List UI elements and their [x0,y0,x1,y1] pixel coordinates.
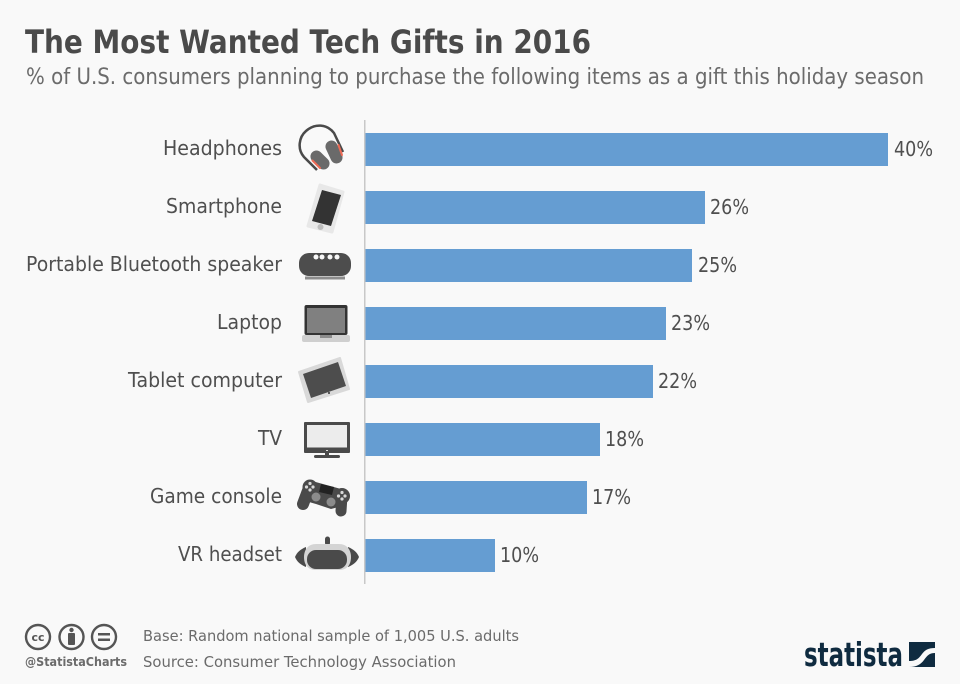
logo: statista: statista [804,635,903,674]
icon: cc: cc [31,631,45,644]
icon: TV [304,422,350,458]
icon: laptop [302,305,350,342]
value labels: 23% [671,311,710,335]
category labels: TV [257,426,282,450]
value labels [500,137,933,567]
value labels: 40% [894,137,933,161]
value labels: 10% [500,543,539,567]
category labels: Headphones [163,136,282,160]
category labels: Laptop [217,310,282,334]
icon: tablet [299,358,349,402]
title: The Most Wanted Tech Gifts in 2016 [25,23,591,61]
category labels: Smartphone [166,194,282,218]
icon: headphones [300,126,345,172]
value labels: 18% [605,427,644,451]
logo mark [909,642,935,667]
category labels: VR headset [178,542,282,566]
icon: smartphone [308,185,343,232]
value labels: 25% [698,253,737,277]
bars [365,133,888,572]
source note: Source: Consumer Technology Association [143,653,456,671]
category labels: Tablet computer [127,368,283,392]
handle: @StatistaCharts [25,655,127,669]
category labels: Game console [150,484,282,508]
category labels: Portable Bluetooth speaker [26,252,283,276]
icon: attribution [60,625,84,649]
axis line [364,120,366,584]
icon: speaker [299,253,351,280]
base note: Base: Random national sample of 1,005 U.S. adults [143,627,519,645]
value labels: 22% [658,369,697,393]
bar chart [26,120,933,584]
footer: licence icons [26,625,116,649]
icon: game controller [302,480,350,511]
category labels [26,136,283,566]
value labels: 26% [710,195,749,219]
icon: no derivatives [92,625,116,649]
value labels: 17% [592,485,631,509]
icon: VR headset [295,536,359,570]
